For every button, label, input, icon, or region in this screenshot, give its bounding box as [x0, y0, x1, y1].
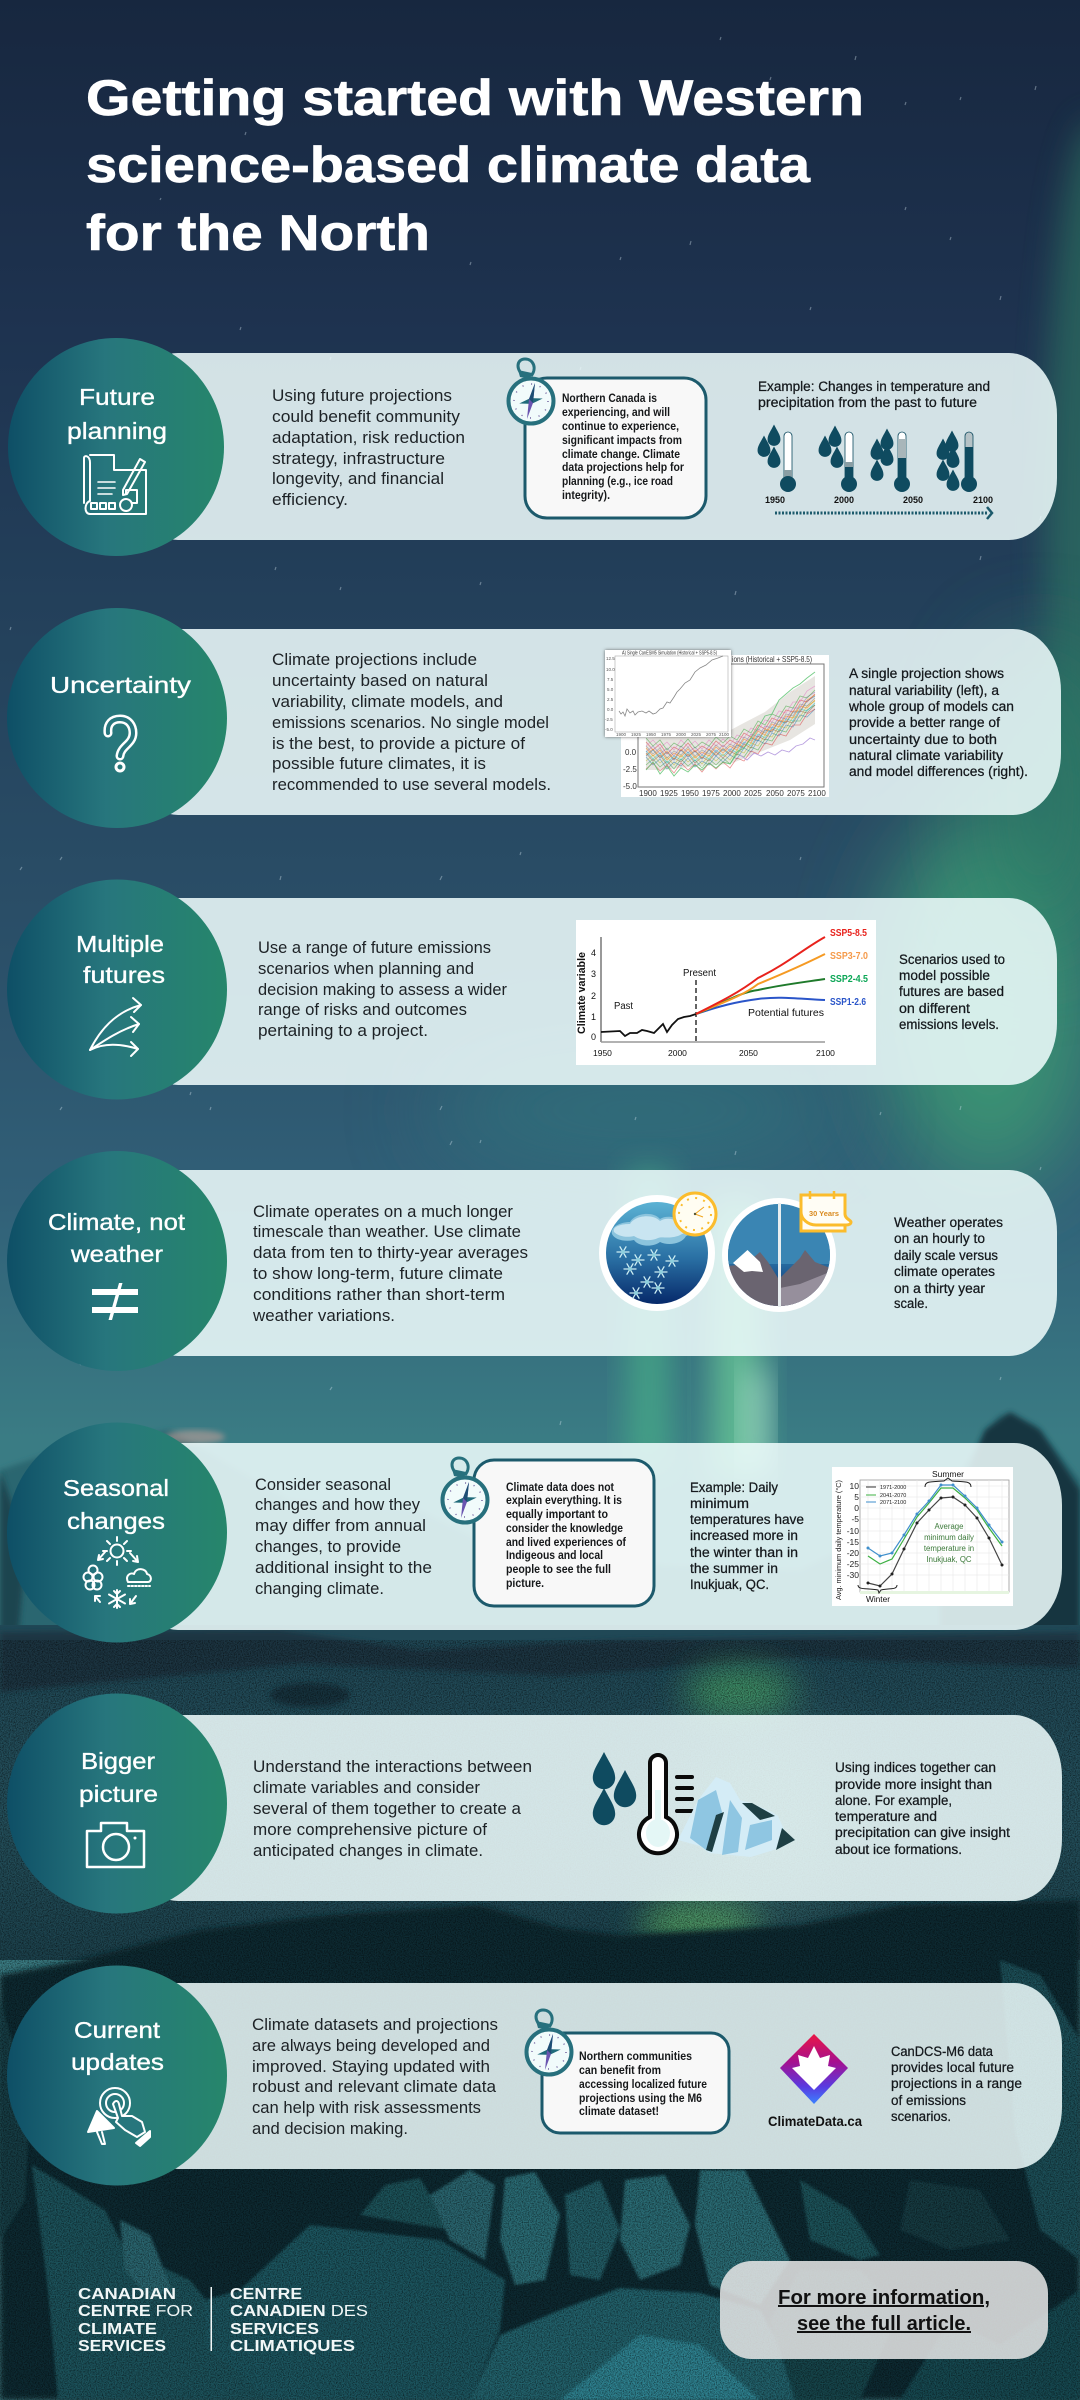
body text [272, 651, 551, 794]
badge heading: weather [70, 1241, 163, 1267]
badge heading [67, 384, 167, 444]
chart: emissions scenarios: Past [614, 1001, 633, 1012]
body text: efficiency. [272, 491, 348, 509]
callout: localized projections: Northern communities [579, 2049, 692, 2063]
badge heading: Uncertainty [50, 672, 192, 698]
chart: average minimum daily temperature in Inukjuak: 10 [850, 1481, 859, 1491]
callout: climate data does not explain everything: people to see the full [506, 1562, 611, 1576]
body text [255, 1476, 432, 1598]
body text: are always being developed and [252, 2037, 490, 2055]
icon: thirty-year calendar [801, 1191, 851, 1231]
title [86, 70, 864, 261]
caption [899, 952, 1005, 1032]
caption: provides local future [891, 2060, 1014, 2075]
icon: question mark [108, 719, 133, 771]
chart: single simulation inset: 2.5 [607, 697, 614, 702]
chart: single simulation inset: 0.0 [607, 707, 614, 712]
card [130, 1715, 1062, 1901]
logo: Canadian Centre for Climate Services: CLIMATIQUES [230, 2338, 355, 2355]
body text: robust and relevant climate data [252, 2078, 497, 2096]
chart: emissions scenarios: 2100 [816, 1048, 835, 1058]
badge heading: Current [74, 2017, 161, 2043]
chart: emissions scenarios: 2000 [668, 1048, 687, 1058]
badge heading [71, 2017, 164, 2075]
chart: average minimum daily temperature in Inukjuak [832, 1467, 1013, 1606]
lower rocks [0, 1960, 1080, 2400]
chart: ensemble of model simulations: -5.0 [623, 782, 637, 791]
caption: temperature and [835, 1809, 937, 1824]
callout: localized projections: accessing localized future [579, 2077, 707, 2091]
chart: single simulation inset: 1950 [646, 732, 657, 737]
chart: single simulation inset: 7.5 [607, 677, 614, 682]
caption: provide more insight than [835, 1777, 992, 1792]
illustration: climate circle split view [722, 1198, 836, 1312]
caption: CanDCS-M6 data [891, 2044, 993, 2059]
chart: single simulation inset: 2000 [676, 732, 687, 737]
card [130, 1170, 1057, 1356]
chart: single simulation inset: 12.5 [606, 656, 615, 661]
caption: of emissions [891, 2093, 966, 2108]
chart: single simulation inset [605, 650, 731, 737]
icon: camera [87, 1823, 144, 1867]
body text: additional insight to the [255, 1559, 432, 1577]
caption: natural variability (left), a [849, 683, 999, 698]
caption: A single projection shows [849, 666, 1004, 681]
caption: natural climate variability [849, 748, 1003, 763]
caption: on a thirty year [894, 1281, 986, 1296]
chart: average minimum daily temperature in Inukjuak: -5 [851, 1514, 859, 1524]
chart: average minimum daily temperature in Inukjuak: 2071-2100 [880, 1500, 906, 1506]
body text: emissions scenarios. No single model [272, 714, 549, 732]
chart: average minimum daily temperature in Inukjuak: -20 [847, 1548, 859, 1558]
stars [10, 37, 1041, 1425]
body text: several of them together to create a [253, 1800, 522, 1818]
caption: daily scale versus [894, 1248, 998, 1263]
body text: Use a range of future emissions [258, 939, 491, 957]
callout: climate data does not explain everything: explain everything. It is [506, 1493, 622, 1507]
badge circle [7, 1422, 227, 1642]
body text: more comprehensive picture of [253, 1821, 487, 1839]
caption: example: minimum [690, 1496, 749, 1511]
caption: example: Example: Daily [690, 1480, 778, 1495]
badge circle [8, 338, 224, 556]
body text: variability, climate models, and [272, 693, 503, 711]
chart: average minimum daily temperature in Inukjuak: 2041-2070 [880, 1493, 906, 1499]
callout: climate data does not explain everything: Indigeous and local [506, 1548, 603, 1562]
callout: localized projections: climate dataset! [579, 2104, 659, 2118]
chart: average minimum daily temperature in Inukjuak: 5 [854, 1492, 859, 1502]
caption: example: temperatures have [690, 1512, 804, 1527]
body text: improved. Staying updated with [252, 2058, 490, 2076]
panel: climate, not weather [7, 1151, 1057, 1371]
panel: seasonal changes [7, 1422, 1062, 1642]
badge heading [48, 1209, 186, 1267]
chart: single simulation inset: 2100 [719, 732, 730, 737]
caption: and model differences (right). [849, 764, 1028, 779]
caption: example: the winter than in [690, 1545, 798, 1560]
caption: futures are based [899, 984, 1004, 999]
caption: about ice formations. [835, 1842, 962, 1857]
caption: uncertainty due to both [849, 732, 997, 747]
body text: data from ten to thirty-year averages [253, 1244, 528, 1262]
caption: example: Inukjuak, QC. [690, 1577, 769, 1592]
chart: average minimum daily temperature in Inukjuak: -15 [847, 1537, 859, 1547]
card [130, 353, 1057, 540]
button: for more information: For more information, [778, 2287, 990, 2309]
panel: uncertainty [7, 608, 1061, 828]
icon: not equal [92, 1283, 138, 1320]
callout: localized projections: projections using the M6 [579, 2091, 702, 2105]
chart: average minimum daily temperature in Inukjuak: Inukjuak, QC [926, 1555, 972, 1564]
caption [835, 1760, 1010, 1857]
chart: single simulation inset: A) Single CanESM5 Simulation (Historical + SSP5-8.5) [622, 650, 717, 656]
chart: emissions scenarios: 1950 [593, 1048, 612, 1058]
body text: conditions rather than short-term [253, 1286, 505, 1304]
title: science-based climate data [86, 137, 811, 193]
title: Getting started with Western [86, 70, 864, 126]
logo: Canadian Centre for Climate Services: CENTRE [230, 2286, 302, 2303]
icon: clock [674, 1193, 716, 1235]
chart: average minimum daily temperature in Inukjuak: 1971-2000 [880, 1485, 906, 1491]
body text [252, 2016, 498, 2138]
button: for more information: see the full article. [797, 2313, 971, 2335]
chart: ensemble of model simulations: 1950 [681, 789, 699, 798]
callout: northern Canada: significant impacts from [562, 433, 682, 447]
badge heading: Future [79, 384, 155, 410]
body text: weather variations. [252, 1307, 395, 1325]
icon: diverging arrows [90, 998, 141, 1056]
grain [0, 1640, 1080, 2400]
chart: emissions scenarios: 4 [591, 948, 596, 958]
chart: ensemble of model simulations: 1975 [702, 789, 720, 798]
badge heading [76, 931, 165, 988]
body text: recommended to use several models. [272, 776, 551, 794]
badge heading: picture [79, 1781, 158, 1807]
caption: example: the summer in [690, 1561, 778, 1576]
chart: single simulation inset: 2075 [706, 732, 717, 737]
caption: precipitation can give insight [835, 1825, 1010, 1840]
callout: northern Canada: climate change. Climate [562, 447, 680, 461]
chart: emissions scenarios [576, 920, 876, 1065]
card [130, 1443, 1062, 1630]
callout: northern Canada [508, 359, 706, 518]
chart: emissions scenarios: Present [683, 968, 716, 979]
card [130, 898, 1057, 1085]
caption: model possible [899, 968, 990, 983]
chart: single simulation inset: -5.0 [605, 727, 613, 732]
body text: can help with risk assessments [252, 2099, 481, 2117]
callout: northern Canada: planning (e.g., ice road [562, 474, 673, 488]
badge heading: Multiple [76, 931, 164, 957]
chart: emissions scenarios: SSP1-2.6 [830, 996, 866, 1008]
chart: average minimum daily temperature in Inukjuak: Average [935, 1522, 963, 1531]
body text: and decision making. [252, 2120, 408, 2138]
badge heading [79, 1748, 158, 1807]
badge circle [7, 1694, 227, 1914]
badge circle [7, 608, 227, 828]
chart: ensemble of model simulations: 2100 [808, 789, 826, 798]
icon: touch and megaphone [88, 2088, 150, 2146]
chart: single simulation inset: 1975 [661, 732, 672, 737]
panel: multiple futures [7, 880, 1057, 1100]
body text: changes and how they [255, 1496, 421, 1514]
caption: projections in a range [891, 2076, 1022, 2091]
body text: longevity, and financial [272, 470, 444, 488]
icon row: drops and thermometers by year: 2000 [834, 495, 854, 505]
callout: climate data does not explain everything: Climate data does not [506, 1480, 614, 1494]
badge heading: Seasonal [63, 1475, 169, 1501]
chart: emissions scenarios: 2050 [739, 1048, 758, 1058]
logo: Canadian Centre for Climate Services [78, 2286, 368, 2355]
callout: climate data does not explain everything: equally important to [506, 1507, 608, 1521]
logo: Canadian Centre for Climate Services: SERVICES [230, 2321, 319, 2338]
caption [891, 2044, 1022, 2124]
chart: single simulation inset: 1900 [616, 732, 627, 737]
chart: single simulation inset: 5.0 [607, 687, 614, 692]
callout: climate data does not explain everything [442, 1458, 654, 1606]
chart: emissions scenarios: 2 [591, 991, 596, 1001]
badge heading: changes [67, 1508, 165, 1534]
chart: ensemble of model simulations: -2.5 [623, 765, 637, 774]
chart: emissions scenarios: Climate variable [576, 952, 588, 1034]
chart: average minimum daily temperature in Inukjuak: temperature in [924, 1544, 974, 1553]
chart: average minimum daily temperature in Inukjuak: minimum daily [924, 1533, 974, 1542]
chart: ensemble of model simulations [621, 654, 829, 798]
chart: ensemble of model simulations: 1900 [639, 789, 657, 798]
chart: emissions scenarios: Potential futures [748, 1008, 824, 1019]
body text: anticipated changes in climate. [253, 1842, 483, 1860]
chart: ensemble of model simulations: 2075 [787, 789, 805, 798]
callout: northern Canada: continue to experience, [562, 419, 679, 433]
body text: scenarios when planning and [258, 960, 474, 978]
body text: Climate datasets and projections [252, 2016, 498, 2034]
icon row: drops and thermometers by year: 2100 [973, 495, 993, 505]
body text: Consider seasonal [255, 1476, 391, 1494]
chart: ensemble of model simulations: 0.0 [625, 748, 637, 757]
chart: average minimum daily temperature in Inukjuak: Summer [932, 1470, 964, 1479]
panel: current updates [7, 1966, 1062, 2186]
callout: climate data does not explain everything: and lived experiences of [506, 1535, 627, 1549]
panel: future planning [8, 338, 1057, 556]
caption: example [690, 1480, 804, 1592]
caption: on different [899, 1001, 970, 1016]
badge heading: planning [67, 418, 167, 444]
caption: climate operates [894, 1264, 995, 1279]
chart: average minimum daily temperature in Inukjuak: Winter [866, 1595, 890, 1604]
callout: northern Canada: data projections help for [562, 460, 684, 474]
callout: localized projections: can benefit from [579, 2063, 661, 2077]
badge circle [7, 880, 227, 1100]
body text: range of risks and outcomes [258, 1001, 467, 1019]
chart: ensemble of model simulations: 2000 [723, 789, 741, 798]
body text: timescale than weather. Use climate [253, 1223, 521, 1241]
body text: strategy, infrastructure [272, 450, 445, 468]
panel: bigger picture [7, 1694, 1062, 1914]
button: for more information [720, 2261, 1048, 2359]
logo: ClimateData.ca [768, 2034, 862, 2129]
chart: single simulation inset: 10.0 [606, 667, 615, 672]
chart: ensemble of model simulations: ions (Historical + SSP5-8.5) [732, 654, 812, 664]
body text: could benefit community [272, 408, 461, 426]
callout: climate data does not explain everything: picture. [506, 1576, 544, 1590]
illustration: weather circle with clock [599, 1195, 715, 1311]
caption: provide a better range of [849, 715, 1000, 730]
chart: average minimum daily temperature in Inukjuak: -10 [847, 1526, 859, 1536]
body text [253, 1758, 532, 1860]
body text: Climate projections include [272, 651, 477, 669]
caption: Using indices together can [835, 1760, 996, 1775]
caption: whole group of models can [848, 699, 1014, 714]
chart: emissions scenarios: SSP5-8.5 [830, 927, 867, 939]
body text: is the best, to provide a picture of [272, 735, 525, 753]
arrow: past to future [775, 507, 992, 519]
badge circle [7, 1966, 227, 2186]
icon: thirty-year calendar: 30 Years [809, 1209, 839, 1218]
body text: pertaining to a project. [258, 1022, 428, 1040]
caption: Weather operates [894, 1215, 1003, 1230]
icon: blueprint and pencil [84, 455, 146, 514]
icon: seasons cycle [84, 1537, 151, 1608]
badge heading: updates [71, 2049, 164, 2075]
chart: average minimum daily temperature in Inukjuak: -25 [847, 1559, 859, 1569]
chart: ensemble of model simulations: 2025 [744, 789, 762, 798]
body text: adaptation, risk reduction [272, 429, 465, 447]
caption: scenarios. [891, 2109, 951, 2124]
body text [252, 1203, 528, 1325]
chart: single simulation inset: -2.5 [605, 717, 613, 722]
body text: possible future climates, it is [272, 755, 486, 773]
chart: single simulation inset: 1925 [631, 732, 642, 737]
logo: Canadian Centre for Climate Services: CANADIEN DES [230, 2303, 368, 2320]
chart: emissions scenarios: 1 [591, 1012, 596, 1022]
caption: emissions levels. [899, 1017, 999, 1032]
icon row: drops and thermometers by year [758, 424, 993, 505]
caption [894, 1215, 1003, 1311]
logo: Canadian Centre for Climate Services: CENTRE FOR [78, 2303, 193, 2320]
body text: Using future projections [272, 387, 452, 405]
badge heading: futures [83, 962, 165, 988]
logo: ClimateData.ca: ClimateData.ca [768, 2113, 862, 2129]
caption: alone. For example, [835, 1793, 952, 1808]
example caption: Example: Changes in temperature and [758, 379, 990, 394]
logo: Canadian Centre for Climate Services: SERVICES [78, 2338, 166, 2355]
illustration: drops, thermometer and ice [593, 1752, 795, 1857]
title: for the North [86, 205, 430, 261]
badge heading [63, 1475, 169, 1534]
caption: on an hourly to [894, 1231, 985, 1246]
chart: single simulation inset: 2025 [691, 732, 702, 737]
body text [272, 387, 465, 509]
body text: may differ from annual [255, 1517, 426, 1535]
chart: ensemble of model simulations: 1925 [660, 789, 678, 798]
chart: emissions scenarios: SSP2-4.5 [830, 973, 868, 985]
icon row: drops and thermometers by year: 1950 [765, 495, 785, 505]
chart: average minimum daily temperature in Inukjuak: 0 [854, 1503, 859, 1513]
badge circle [7, 1151, 227, 1371]
body text: Understand the interactions between [253, 1758, 532, 1776]
example caption: precipitation from the past to future [758, 395, 977, 410]
card [130, 629, 1061, 815]
logo: Canadian Centre for Climate Services: CANADIAN [78, 2286, 176, 2303]
body text: changing climate. [255, 1580, 384, 1598]
callout: northern Canada: Northern Canada is [562, 391, 657, 405]
callout: localized projections [526, 2010, 729, 2133]
caption [848, 666, 1028, 779]
callout: northern Canada: experiencing, and will [562, 405, 670, 419]
caption: scale. [894, 1296, 928, 1311]
chart: emissions scenarios: 3 [591, 969, 596, 979]
body text: changes, to provide [255, 1538, 401, 1556]
caption: example: increased more in [690, 1528, 798, 1543]
body text: uncertainty based on natural [272, 672, 488, 690]
card [130, 1983, 1062, 2169]
body text: to show long-term, future climate [253, 1265, 503, 1283]
callout: northern Canada: integrity). [562, 488, 610, 502]
chart: emissions scenarios: SSP3-7.0 [830, 950, 868, 962]
chart: average minimum daily temperature in Inukjuak: -30 [847, 1570, 859, 1580]
chart: average minimum daily temperature in Inukjuak: Avg. minimum daily temperature (°C) [834, 1480, 843, 1600]
badge heading: Climate, not [48, 1209, 186, 1235]
body text: climate variables and consider [253, 1779, 481, 1797]
body text [258, 939, 507, 1040]
chart: emissions scenarios: 0 [591, 1032, 596, 1042]
badge heading: Bigger [81, 1748, 155, 1774]
chart: ensemble of model simulations: 2050 [766, 789, 784, 798]
callout: climate data does not explain everything: consider the knowledge [506, 1521, 623, 1535]
caption: Scenarios used to [899, 952, 1005, 967]
logo: Canadian Centre for Climate Services: CLIMATE [78, 2321, 157, 2338]
body text: Climate operates on a much longer [253, 1203, 514, 1221]
body text: decision making to assess a wider [258, 981, 507, 999]
icon row: drops and thermometers by year: 2050 [903, 495, 923, 505]
example caption [758, 379, 990, 410]
